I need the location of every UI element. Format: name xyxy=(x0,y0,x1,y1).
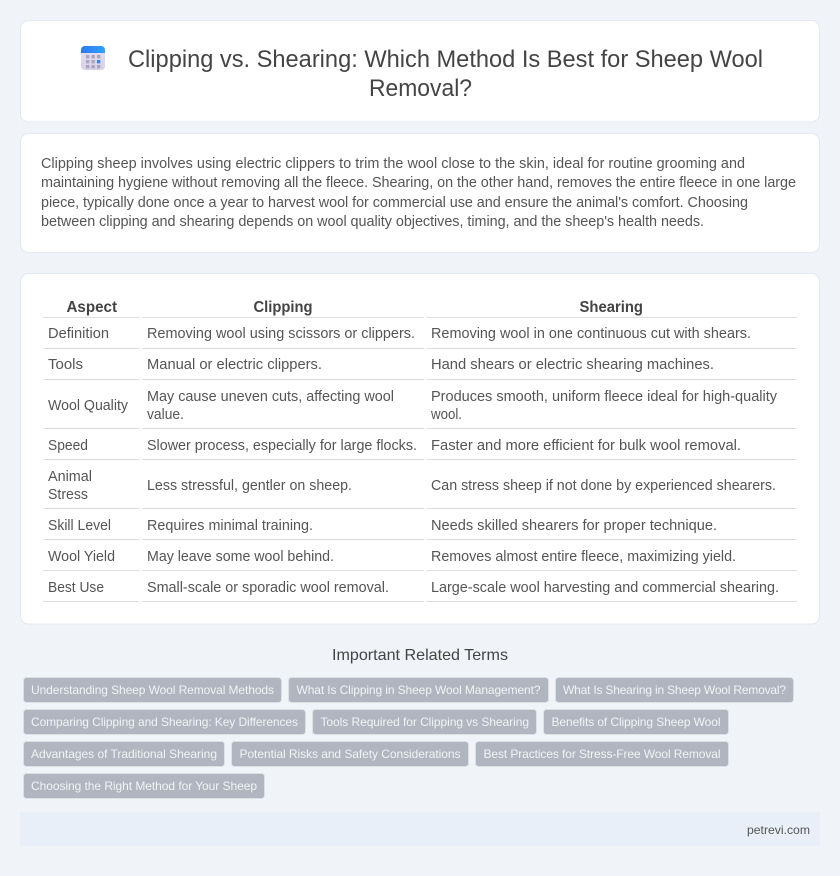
row: speed: Speed xyxy=(48,438,88,454)
row: wool quality: value. xyxy=(147,407,184,423)
tag xyxy=(24,678,282,702)
icon: calendar xyxy=(81,46,105,70)
row: wool quality: Produces smooth, uniform fleece ideal for high-quality xyxy=(431,389,778,405)
table header row: Aspect xyxy=(66,299,118,316)
row: skill level: Requires minimal training. xyxy=(147,518,313,534)
row: tools: Manual or electric clippers. xyxy=(147,357,322,373)
row: wool quality: wool. xyxy=(430,407,462,423)
row: best use xyxy=(48,580,779,596)
row: animal stress xyxy=(48,469,776,503)
title: Clipping vs. Shearing: Which Method Is Best for Sheep Wool xyxy=(128,46,763,73)
text block: introduction paragraph: between clipping and shearing depends on wool quality objectives, timing, and the sheep's health needs. xyxy=(41,214,704,230)
row: skill level xyxy=(48,518,717,534)
tag: Choosing the Right Method for Your Sheep xyxy=(31,779,257,793)
tag xyxy=(232,742,468,766)
row: wool quality: May cause uneven cuts, affecting wool xyxy=(147,389,394,405)
row: wool quality: Wool Quality xyxy=(48,398,129,414)
footer xyxy=(20,812,820,846)
tag xyxy=(24,710,306,734)
row: definition: Removing wool in one continuous cut with shears. xyxy=(431,326,751,342)
row: skill level: Skill Level xyxy=(48,518,111,534)
row: animal stress: Animal xyxy=(48,469,92,485)
tag xyxy=(288,678,548,702)
footer: petrevi.com xyxy=(747,823,810,837)
row: wool yield: Wool Yield xyxy=(48,549,115,565)
text block: introduction paragraph xyxy=(41,156,796,230)
tag: Advantages of Traditional Shearing xyxy=(31,747,217,761)
tag xyxy=(24,774,264,798)
row: skill level: Needs skilled shearers for proper technique. xyxy=(431,518,717,534)
table header row xyxy=(66,299,643,316)
tag xyxy=(476,742,728,766)
tag: What Is Clipping in Sheep Wool Management? xyxy=(296,683,541,697)
tag: Best Practices for Stress-Free Wool Removal xyxy=(484,747,720,761)
title xyxy=(128,46,763,102)
table header row: Shearing xyxy=(580,299,643,316)
row: wool yield: Removes almost entire fleece, maximizing yield. xyxy=(431,549,736,565)
row: tools: Hand shears or electric shearing machines. xyxy=(431,357,714,373)
row: wool yield xyxy=(48,549,736,565)
tag: Understanding Sheep Wool Removal Methods xyxy=(31,683,274,697)
tag xyxy=(312,710,536,734)
row: definition: Removing wool using scissors or clippers. xyxy=(147,326,415,342)
row: animal stress: Can stress sheep if not done by experienced shearers. xyxy=(431,478,776,494)
row: speed: Faster and more efficient for bulk wool removal. xyxy=(431,438,741,454)
tag xyxy=(544,710,728,734)
heading: important related terms: Important Related Terms xyxy=(332,647,508,664)
text block: introduction paragraph: maintaining hygiene without removing all the fleece. Shearing, on the other hand, removes the entire fleece in one large xyxy=(41,175,796,191)
row: definition: Definition xyxy=(48,326,109,342)
tag: Potential Risks and Safety Considerations xyxy=(240,747,460,761)
row: best use: Large-scale wool harvesting and commercial shearing. xyxy=(431,580,779,596)
tag xyxy=(556,678,794,702)
panel: comparison table xyxy=(20,274,820,624)
row: speed: Slower process, especially for large flocks. xyxy=(147,438,417,454)
row: tools xyxy=(48,357,714,373)
text block: introduction paragraph: Clipping sheep involves using electric clippers to trim the wool close to the skin, ideal for routine grooming and xyxy=(41,156,745,172)
tag: Benefits of Clipping Sheep Wool xyxy=(552,715,720,729)
row: wool quality xyxy=(48,389,778,423)
row: animal stress: Stress xyxy=(48,487,88,503)
row: definition xyxy=(48,326,751,342)
row: best use: Best Use xyxy=(48,580,104,596)
row: tools: Tools xyxy=(48,357,83,373)
title: Removal? xyxy=(369,75,472,102)
tag: What Is Shearing in Sheep Wool Removal? xyxy=(563,683,786,697)
panel: header xyxy=(20,20,820,122)
row: speed xyxy=(48,438,741,454)
tag: Tools Required for Clipping vs Shearing xyxy=(320,715,529,729)
tag xyxy=(24,742,224,766)
tag: Comparing Clipping and Shearing: Key Differences xyxy=(31,715,298,729)
row: animal stress: Less stressful, gentler on sheep. xyxy=(147,478,352,494)
panel: related term tags xyxy=(24,678,794,798)
text block: introduction paragraph: piece, typically done once a year to harvest wool for commercial use and ensure the animal's comfort. Choosing xyxy=(41,195,748,211)
row: wool yield: May leave some wool behind. xyxy=(147,549,334,565)
row: best use: Small-scale or sporadic wool removal. xyxy=(147,580,389,596)
panel: introduction xyxy=(20,134,820,252)
table header row: Clipping xyxy=(254,299,312,316)
